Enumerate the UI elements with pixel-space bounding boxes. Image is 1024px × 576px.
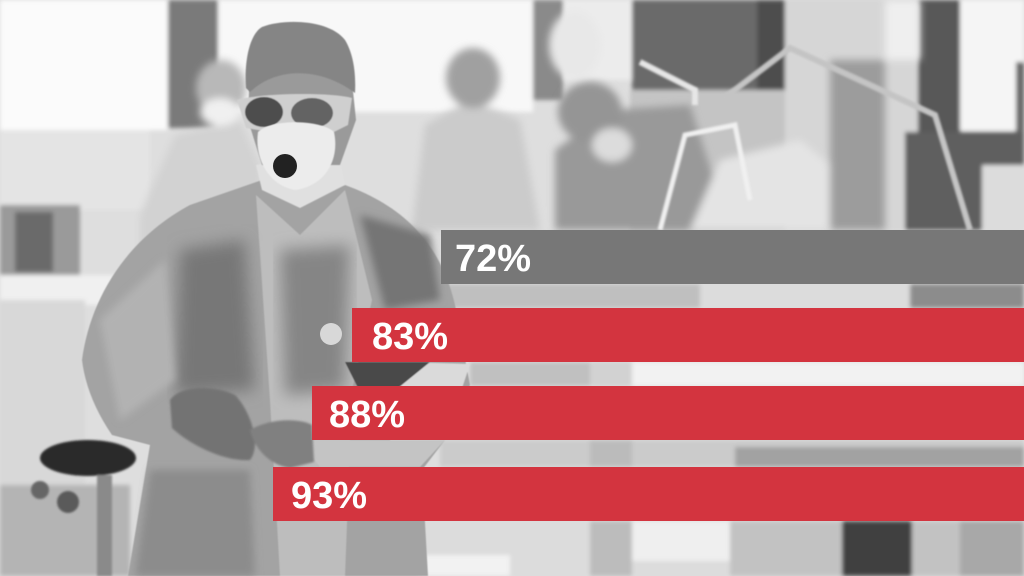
gown: [82, 180, 470, 576]
bar: 88%: [312, 386, 1024, 440]
bar: 93%: 93%: [291, 475, 367, 517]
bar: 72%: 72%: [455, 238, 531, 280]
respirator valve: [273, 154, 297, 178]
background staff: [140, 0, 920, 290]
goggles: [237, 94, 352, 134]
gloved hands: [170, 388, 314, 468]
bar: 72%: [441, 230, 1024, 284]
bar: 88%: 88%: [329, 394, 405, 436]
foreground bed and equipment: [420, 284, 1024, 576]
face: [248, 62, 356, 165]
name badge: [320, 323, 342, 345]
bar: 83%: [352, 308, 1024, 362]
respirator mask: [257, 122, 335, 190]
doctor in protective gear: [82, 22, 470, 576]
neck wrap: [256, 150, 345, 208]
surgical cap: [246, 22, 355, 93]
bar: 83%: 83%: [372, 316, 448, 358]
bar: 93%: [273, 467, 1024, 521]
stool: [31, 440, 136, 576]
